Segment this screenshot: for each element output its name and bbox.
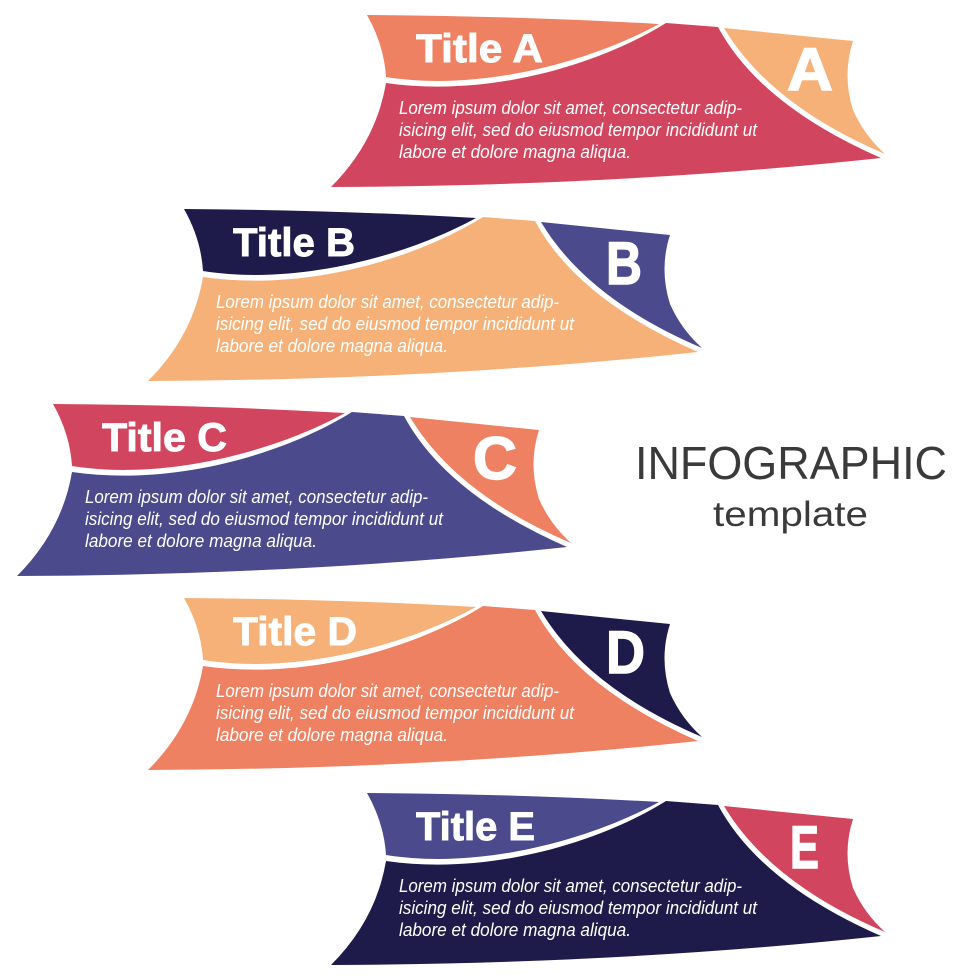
body text B: isicing elit, sed do eiusmod tempor incididunt ut [216, 314, 575, 334]
body text D: labore et dolore magna aliqua. [216, 725, 448, 745]
body text E: isicing elit, sed do eiusmod tempor incididunt ut [399, 898, 758, 918]
main shape A [331, 23, 881, 187]
body text D: isicing elit, sed do eiusmod tempor incididunt ut [216, 703, 575, 723]
title tab E [367, 793, 659, 859]
body text B: labore et dolore magna aliqua. [216, 336, 448, 356]
body text E: Lorem ipsum dolor sit amet, consectetur adip- [399, 876, 742, 896]
panel: B [148, 209, 702, 381]
letter E: E [790, 814, 819, 881]
body text A: isicing elit, sed do eiusmod tempor incididunt ut [399, 120, 758, 140]
letter C: C [473, 425, 517, 492]
panel: E [331, 793, 885, 965]
title text E: Title E [416, 805, 535, 849]
body text C: Lorem ipsum dolor sit amet, consectetur adip- [85, 487, 428, 507]
corner tab E [724, 806, 885, 932]
main shape E [331, 801, 881, 965]
title tab C [53, 404, 345, 470]
heading line 1: INFOGRAPHIC [635, 437, 947, 489]
title tab D [184, 598, 476, 664]
main shape D [148, 606, 698, 770]
body text B: Lorem ipsum dolor sit amet, consectetur adip- [216, 292, 559, 312]
title text C: Title C [102, 416, 227, 460]
body text E: labore et dolore magna aliqua. [399, 920, 631, 940]
corner tab C [410, 417, 571, 543]
letter B: B [606, 230, 642, 297]
main shape C [17, 412, 567, 576]
body text D: Lorem ipsum dolor sit amet, consectetur adip- [216, 681, 559, 701]
body text C: labore et dolore magna aliqua. [85, 531, 317, 551]
corner tab A [724, 28, 885, 154]
panel: A [331, 15, 885, 187]
title text D: Title D [233, 610, 357, 654]
body text A: labore et dolore magna aliqua. [399, 142, 631, 162]
heading line 2: template [713, 495, 868, 534]
panel: C [17, 404, 571, 576]
body text A: Lorem ipsum dolor sit amet, consectetur adip- [399, 98, 742, 118]
panel: D [148, 598, 702, 770]
title tab A [367, 15, 659, 81]
corner tab D [541, 611, 702, 737]
heading: INFOGRAPHIC template [635, 437, 947, 534]
main shape B [148, 217, 698, 381]
corner tab B [541, 222, 702, 348]
letter A: A [787, 36, 833, 103]
body text C: isicing elit, sed do eiusmod tempor incididunt ut [85, 509, 444, 529]
letter D: D [606, 619, 645, 686]
title tab B [184, 209, 476, 275]
title text B: Title B [233, 221, 355, 265]
title text A: Title A [416, 27, 543, 71]
